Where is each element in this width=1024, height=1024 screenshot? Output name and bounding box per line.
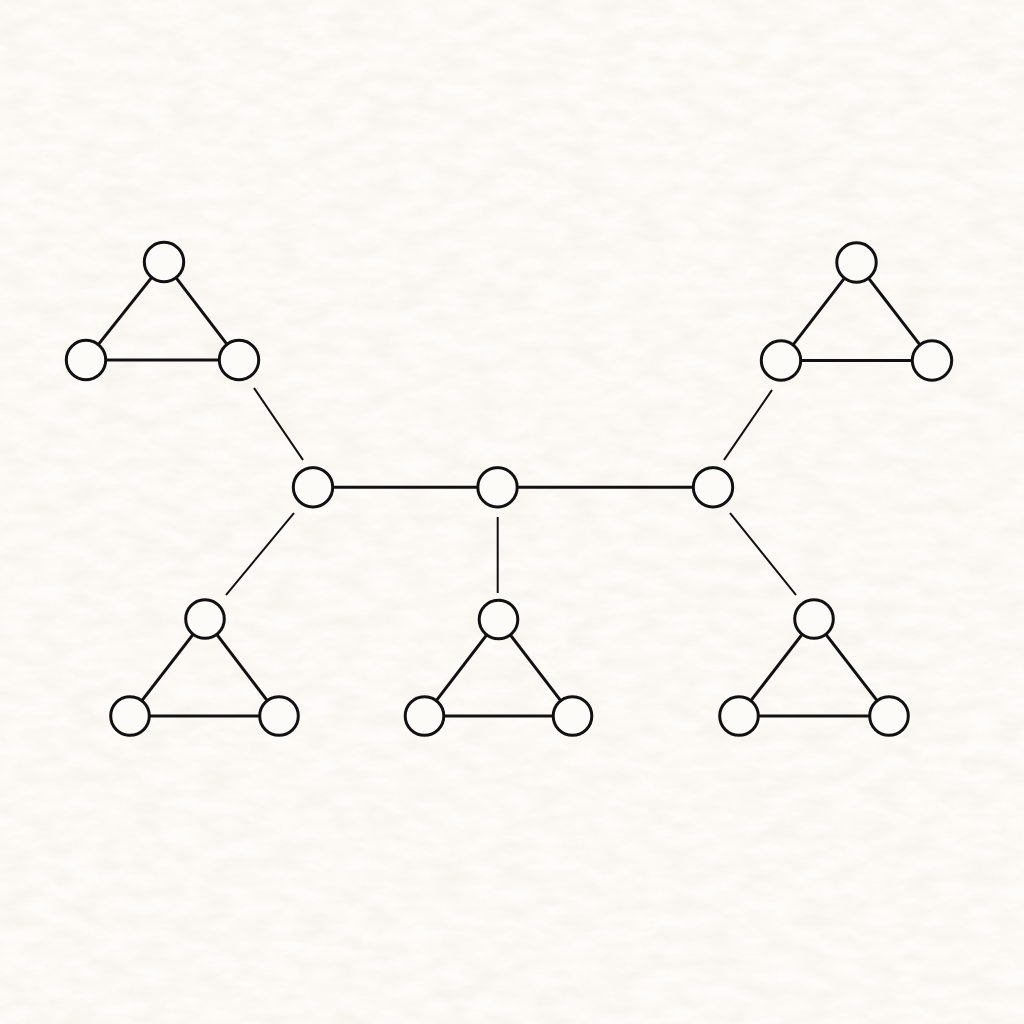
triangle cluster: top right <box>761 243 952 380</box>
central hub: three connected nodes <box>293 468 733 507</box>
connector lines between hub and clusters <box>226 388 796 595</box>
triangle cluster: top left <box>66 242 259 380</box>
triangle cluster: bottom left <box>111 600 298 735</box>
triangle cluster: bottom right <box>720 600 908 735</box>
triangle cluster: bottom centre <box>405 600 592 735</box>
